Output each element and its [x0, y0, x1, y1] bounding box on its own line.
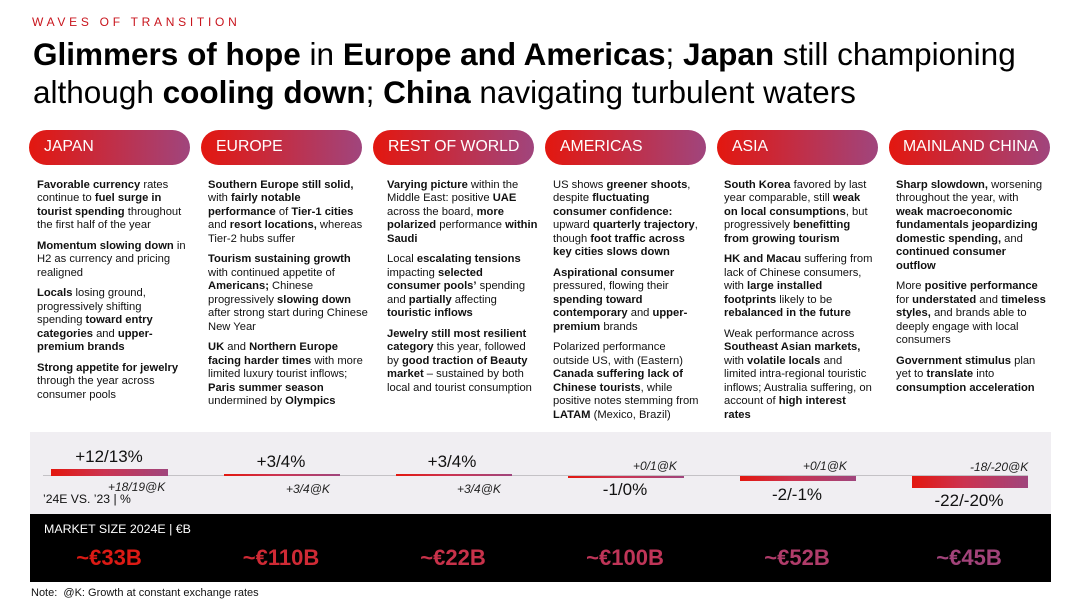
text: Japan — [37, 179, 186, 401]
text: Europe: New Year — [208, 321, 256, 333]
value: Americas: -1/0% — [603, 480, 647, 498]
bar: Asia — [740, 476, 856, 480]
text: Americas: LATAM (Mexico, Brazil) — [553, 409, 671, 421]
text: Asia: footprints likely to be — [724, 294, 832, 306]
text: Asia: from growing tourism — [724, 233, 840, 245]
text: Asia: South Korea favored by last — [724, 179, 866, 191]
text: Rest of World: touristic inflows — [387, 307, 473, 319]
market: Europe: ~€110B — [243, 545, 319, 570]
text: Europe — [208, 179, 368, 407]
text: Asia: Southeast Asian markets, — [724, 341, 860, 353]
text: Europe: undermined by Olympics — [208, 395, 336, 407]
header: Americas: AMERICAS — [560, 138, 643, 155]
value: Asia: -2/-1% — [772, 485, 822, 504]
text: Americas: consumer confidence: — [553, 206, 672, 218]
text: Americas: Polarized performance — [553, 341, 666, 353]
bar: Japan — [51, 469, 168, 476]
text: Americas: spending toward — [553, 294, 642, 306]
bar: Mainland China — [912, 476, 1028, 488]
text: Europe: with continued appetite of — [208, 267, 335, 279]
title: Glimmers of hope in Europe and Americas; Japan still championing — [33, 36, 1016, 72]
text: Asia: inflows; Australia suffering, on — [724, 382, 872, 394]
text: Americas: Aspirational consumer — [553, 267, 674, 279]
text: Europe: Americans; Chinese — [208, 280, 313, 292]
text: Asia — [724, 179, 872, 421]
text: Mainland China: outflow — [896, 260, 936, 272]
market: Americas: ~€100B — [586, 545, 664, 570]
text: Asia: rebalanced in the future — [724, 307, 851, 319]
text: Rest of World: impacting selected — [387, 267, 483, 279]
text: Asia: Weak performance across — [724, 328, 854, 340]
text: Asia: with large installed — [724, 280, 822, 292]
footnote: Note: @K: Growth at constant exchange rates — [31, 587, 259, 599]
text: Europe: Tourism sustaining growth — [208, 253, 351, 265]
constant FX: Americas: +0/1@K — [633, 458, 677, 472]
text: Europe: Tier-2 hubs suffer — [208, 233, 295, 245]
text: Japan: through the year across — [37, 375, 155, 387]
text: Asia: year comparable, still weak — [724, 192, 860, 204]
text: Mainland China: consumers — [896, 334, 951, 346]
text: Japan: Favorable currency rates — [37, 179, 168, 191]
text: Mainland China: Government stimulus plan — [896, 355, 1035, 367]
text: Americas: upward quarterly trajectory, — [553, 219, 698, 231]
market size caption: MARKET SIZE 2024E | €B — [44, 522, 191, 536]
text: Americas: despite fluctuating — [553, 192, 649, 204]
axis caption: ’24E VS. ’23 | % — [43, 492, 131, 506]
text: Rest of World: Saudi — [387, 233, 417, 245]
market: Rest of World: ~€22B — [420, 545, 486, 570]
text: Mainland China: for understated and timeless — [896, 294, 1046, 306]
text: Americas: contemporary and upper- — [553, 307, 687, 319]
header: Europe: EUROPE — [216, 138, 283, 155]
text: Europe: with fairly notable — [208, 192, 301, 204]
text: Rest of World: by good traction of Beauty — [387, 355, 528, 367]
text: Rest of World: Varying picture within the — [387, 179, 518, 191]
text: Rest of World — [387, 179, 537, 394]
title: although cooling down; China navigating turbulent waters — [33, 74, 856, 110]
text: Asia: limited intra-regional touristic — [724, 368, 866, 380]
market size band — [30, 514, 1051, 582]
text: Mainland China: deeply engage with local — [896, 321, 1019, 333]
market: Asia: ~€52B — [764, 545, 830, 570]
eyebrow label: WAVES OF TRANSITION — [32, 15, 240, 29]
text: Europe: progressively slowing down — [208, 294, 351, 306]
text: Rest of World: consumer pools’ spending — [387, 280, 525, 292]
text: Japan: progressively shifting — [37, 301, 141, 313]
bar: Europe — [224, 474, 340, 476]
constant FX: Japan: +18/19@K — [108, 480, 165, 494]
text: Americas — [553, 179, 698, 421]
text: Asia: rates — [724, 409, 751, 421]
header: Mainland China — [889, 130, 1050, 165]
text: Mainland China: weak macroeconomic — [896, 206, 1012, 218]
text: Mainland China: Sharp slowdown, worsening — [896, 179, 1042, 191]
text: Japan: premium brands — [37, 341, 125, 353]
header: Americas — [545, 130, 706, 165]
value: Europe: +3/4% — [257, 452, 305, 471]
value: Mainland China: -22/-20% — [934, 491, 1003, 510]
text: Japan: Strong appetite for jewelry — [37, 362, 178, 374]
market: Mainland China: ~€45B — [936, 545, 1002, 570]
text: Americas: though foot traffic across — [553, 233, 685, 245]
text: Japan: categories and upper- — [37, 328, 153, 340]
text: Europe: facing harder times with more — [208, 355, 363, 367]
constant FX: Europe: +3/4@K — [286, 482, 330, 496]
text: Japan: the first half of the year — [37, 219, 151, 231]
text: Americas: positive notes stemming from — [553, 395, 698, 407]
text: Mainland China: styles, and brands able to — [896, 307, 1027, 319]
text: Americas: Chinese tourists, while — [553, 382, 672, 394]
bar: Rest of World — [396, 474, 512, 476]
axis line — [43, 475, 1028, 476]
value: Rest of World: +3/4% — [428, 452, 476, 471]
constant FX: Asia: +0/1@K — [803, 458, 847, 472]
header: Japan: JAPAN — [44, 138, 94, 155]
text: Japan: continue to fuel surge in — [37, 192, 161, 204]
text: Rest of World: Local escalating tensions — [387, 253, 521, 265]
text: Mainland China — [896, 179, 1046, 394]
text: Mainland China: throughout the year, with — [896, 192, 1019, 204]
text: Europe: after strong start during Chinese — [208, 307, 368, 319]
growth panel — [30, 432, 1051, 514]
text: Japan: Momentum slowing down in — [37, 240, 186, 252]
text: Rest of World: market – sustained by both — [387, 368, 524, 380]
text: Asia: with volatile locals and — [724, 355, 842, 367]
text: Rest of World: polarized performance within — [387, 219, 537, 231]
text: Mainland China: continued consumer — [896, 246, 1006, 258]
text: Mainland China: domestic spending, and — [896, 233, 1023, 245]
text: Rest of World: category this year, followed — [387, 341, 526, 353]
text: Americas: Canada suffering lack of — [553, 368, 683, 380]
text: Mainland China: consumption acceleration — [896, 382, 1035, 394]
header: Rest of World: REST OF WORLD — [388, 138, 519, 155]
header: Japan — [29, 130, 190, 165]
text: Mainland China: More positive performance — [896, 280, 1038, 292]
text: Asia: HK and Macau suffering from — [724, 253, 872, 265]
text: Japan: Locals losing ground, — [37, 287, 146, 299]
header: Europe — [201, 130, 362, 165]
header: Asia — [717, 130, 878, 165]
text: Rest of World: Middle East: positive UAE — [387, 192, 516, 204]
text: Japan: tourist spending throughout — [37, 206, 181, 218]
text: Americas: outside US, with (Eastern) — [553, 355, 683, 367]
text: Asia: progressively benefitting — [724, 219, 850, 231]
text: Mainland China: fundamentals jeopardizing — [896, 219, 1038, 231]
constant FX: Rest of World: +3/4@K — [457, 482, 501, 496]
text: Europe: limited luxury tourist inflows; — [208, 368, 347, 380]
value: Japan: +12/13% — [75, 447, 143, 466]
text: Americas: key cities slows down — [553, 246, 670, 258]
text: Europe: UK and Northern Europe — [208, 341, 338, 353]
market: Japan: ~€33B — [76, 545, 142, 570]
text: Europe: Paris summer season — [208, 382, 324, 394]
title — [33, 36, 1016, 110]
text: Asia: account of high interest — [724, 395, 846, 407]
text: Rest of World: across the board, more — [387, 206, 504, 218]
text: Europe: and resort locations, whereas — [208, 219, 362, 231]
text: Japan: spending toward entry — [37, 314, 153, 326]
text: Americas: pressured, flowing their — [553, 280, 669, 292]
text: Rest of World: Jewelry still most resilient — [387, 328, 526, 340]
text: Asia: on local consumptions, but — [724, 206, 868, 218]
text: Europe: performance of Tier-1 cities — [208, 206, 353, 218]
text: Rest of World: local and tourist consumption — [387, 382, 532, 394]
header: Rest of World — [373, 130, 534, 165]
text: Japan: H2 as currency and pricing — [37, 253, 170, 265]
header: Asia: ASIA — [732, 138, 768, 155]
text: Japan: consumer pools — [37, 389, 116, 401]
bar: Americas — [568, 476, 684, 478]
text: Asia: lack of Chinese consumers, — [724, 267, 861, 279]
header: Mainland China: MAINLAND CHINA — [903, 138, 1038, 155]
text: Americas: US shows greener shoots, — [553, 179, 690, 191]
text: Rest of World: and partially affecting — [387, 294, 497, 306]
text: Japan: realigned — [37, 267, 83, 279]
constant FX: Mainland China: -18/-20@K — [970, 460, 1028, 474]
text: Europe: Southern Europe still solid, — [208, 179, 353, 191]
text: Americas: premium brands — [553, 321, 638, 333]
text: Mainland China: yet to translate into — [896, 368, 994, 380]
